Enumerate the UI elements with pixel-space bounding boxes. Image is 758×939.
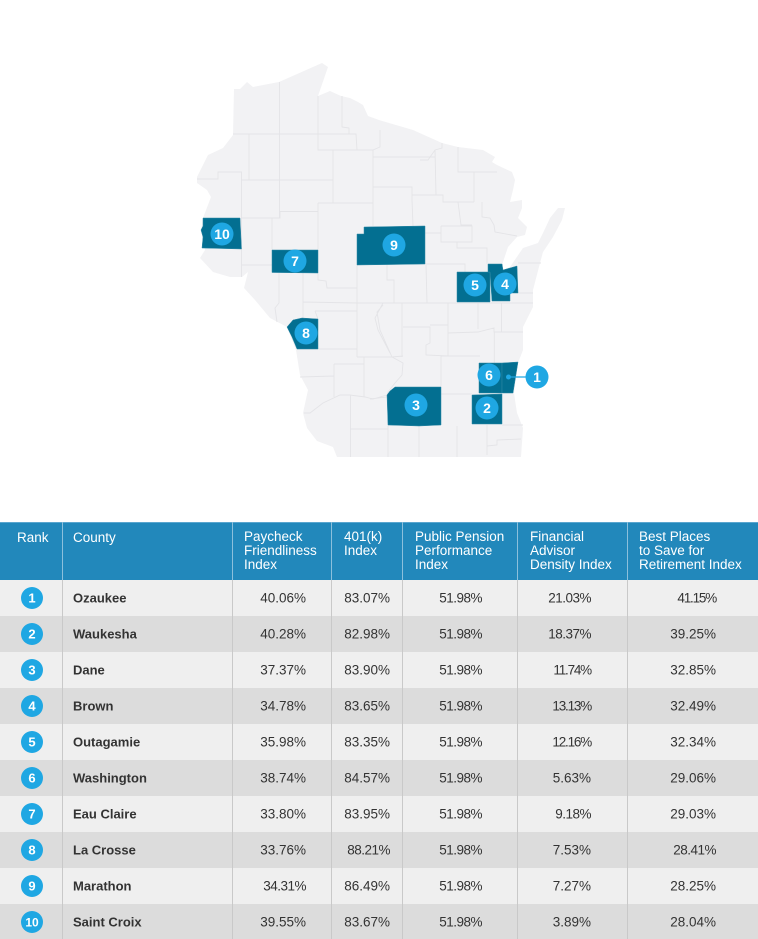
row 7: 33.80% bbox=[260, 806, 306, 822]
row 1: 40.06% bbox=[260, 590, 306, 606]
map badges: 7 bbox=[291, 253, 299, 269]
row 7: Eau Claire bbox=[73, 806, 137, 822]
row 3: 11.74% bbox=[553, 662, 592, 678]
row 2 bbox=[21, 623, 716, 645]
row 7: 9.18% bbox=[555, 806, 591, 822]
row 2: Waukesha bbox=[73, 626, 138, 642]
row 3 bbox=[21, 659, 716, 681]
map badges: 2 bbox=[483, 400, 491, 416]
row 2: 51.98% bbox=[439, 626, 482, 642]
row 5: 12.16% bbox=[552, 734, 592, 750]
row 1: 1 bbox=[28, 590, 36, 606]
row 8: La Crosse bbox=[73, 842, 136, 858]
row 8 bbox=[21, 839, 716, 861]
row 10: Saint Croix bbox=[73, 914, 142, 930]
map badges bbox=[210, 222, 548, 420]
row 2: 2 bbox=[28, 626, 36, 642]
row 2: 40.28% bbox=[260, 626, 306, 642]
row 7 bbox=[21, 803, 716, 825]
row 3: 51.98% bbox=[439, 662, 482, 678]
row 6 bbox=[21, 767, 716, 789]
row 4: 4 bbox=[28, 698, 36, 714]
row 3: 83.90% bbox=[344, 662, 390, 678]
row 10: 83.67% bbox=[344, 914, 390, 930]
row 5: Outagamie bbox=[73, 734, 140, 750]
table header: Rank bbox=[17, 530, 49, 545]
row 5: 51.98% bbox=[439, 734, 482, 750]
row 1: Ozaukee bbox=[73, 590, 126, 606]
table header: Index bbox=[244, 557, 277, 572]
row 6: 6 bbox=[28, 770, 36, 786]
row 5: 83.35% bbox=[344, 734, 390, 750]
row 10: 28.04% bbox=[670, 914, 716, 930]
table header: Retirement Index bbox=[639, 557, 742, 572]
row 1: 83.07% bbox=[344, 590, 390, 606]
table header: Friendliness bbox=[244, 543, 317, 558]
table header: Index bbox=[344, 543, 377, 558]
table header: Advisor bbox=[530, 543, 576, 558]
row 3: 32.85% bbox=[670, 662, 716, 678]
row 4: 83.65% bbox=[344, 698, 390, 714]
row 9: 28.25% bbox=[670, 878, 716, 894]
row 9: 51.98% bbox=[439, 878, 482, 894]
row 1: 41.15% bbox=[677, 590, 717, 606]
row 7: 51.98% bbox=[439, 806, 482, 822]
row 4 bbox=[21, 695, 716, 717]
row 6: 51.98% bbox=[439, 770, 482, 786]
table header bbox=[0, 522, 758, 580]
row 1 bbox=[21, 587, 717, 609]
row 7: 7 bbox=[28, 806, 36, 822]
row 1: 51.98% bbox=[439, 590, 482, 606]
table header: Public Pension bbox=[415, 529, 504, 544]
row 4: 51.98% bbox=[439, 698, 482, 714]
callout line for rank 1 bbox=[506, 374, 537, 380]
row 3: 3 bbox=[28, 662, 36, 678]
row 5: 35.98% bbox=[260, 734, 306, 750]
map badges: 6 bbox=[485, 367, 493, 383]
row 8: 8 bbox=[28, 842, 36, 858]
map badges: 9 bbox=[390, 237, 398, 253]
table header: Index bbox=[415, 557, 448, 572]
row 5: 32.34% bbox=[670, 734, 716, 750]
map badges: 4 bbox=[501, 276, 509, 292]
row 6: 29.06% bbox=[670, 770, 716, 786]
row 7: 29.03% bbox=[670, 806, 716, 822]
table bbox=[0, 522, 758, 939]
table header: 401(k) bbox=[344, 529, 382, 544]
table header: Best Places bbox=[639, 529, 711, 544]
row 3: 37.37% bbox=[260, 662, 306, 678]
highlighted counties bbox=[201, 218, 518, 426]
map badges: 5 bbox=[471, 277, 479, 293]
table header: Paycheck bbox=[244, 529, 303, 544]
row 1: 21.03% bbox=[548, 590, 591, 606]
row 9: 9 bbox=[28, 878, 36, 894]
row 7: 83.95% bbox=[344, 806, 390, 822]
row 3: Dane bbox=[73, 662, 105, 678]
state outline bbox=[197, 63, 565, 457]
table header: County bbox=[73, 530, 116, 545]
row 9: Marathon bbox=[73, 878, 132, 894]
row 4: Brown bbox=[73, 698, 114, 714]
row 4: 32.49% bbox=[670, 698, 716, 714]
table header: to Save for bbox=[639, 543, 705, 558]
row 10: 51.98% bbox=[439, 914, 482, 930]
map badges: 10 bbox=[214, 226, 230, 242]
row 8: 7.53% bbox=[553, 842, 591, 858]
row 8: 51.98% bbox=[439, 842, 482, 858]
table header: Financial bbox=[530, 529, 584, 544]
row 10: 10 bbox=[25, 916, 39, 930]
row 6: 84.57% bbox=[344, 770, 390, 786]
row 6: 5.63% bbox=[553, 770, 591, 786]
map badges: 8 bbox=[302, 325, 310, 341]
row 9: 86.49% bbox=[344, 878, 390, 894]
row 9: 34.31% bbox=[263, 878, 306, 894]
table rows bbox=[0, 580, 758, 939]
row 10: 3.89% bbox=[553, 914, 591, 930]
row 10 bbox=[21, 911, 716, 933]
row 2: 39.25% bbox=[670, 626, 716, 642]
row 10: 39.55% bbox=[260, 914, 306, 930]
row 4: 34.78% bbox=[260, 698, 306, 714]
table header: Performance bbox=[415, 543, 492, 558]
row 8: 28.41% bbox=[673, 842, 716, 858]
row 2: 82.98% bbox=[344, 626, 390, 642]
map badges: 3 bbox=[412, 397, 420, 413]
row 5 bbox=[21, 731, 716, 753]
row 8: 33.76% bbox=[260, 842, 306, 858]
row 6: 38.74% bbox=[260, 770, 306, 786]
row 8: 88.21% bbox=[347, 842, 390, 858]
row 2: 18.37% bbox=[548, 626, 591, 642]
map of Wisconsin bbox=[197, 63, 565, 457]
row 9: 7.27% bbox=[553, 878, 591, 894]
map badges: 1 bbox=[533, 369, 541, 385]
row 6: Washington bbox=[73, 770, 147, 786]
table header: Density Index bbox=[530, 557, 612, 572]
row 4: 13.13% bbox=[552, 698, 592, 714]
row 5: 5 bbox=[28, 734, 36, 750]
row 9 bbox=[21, 875, 716, 897]
